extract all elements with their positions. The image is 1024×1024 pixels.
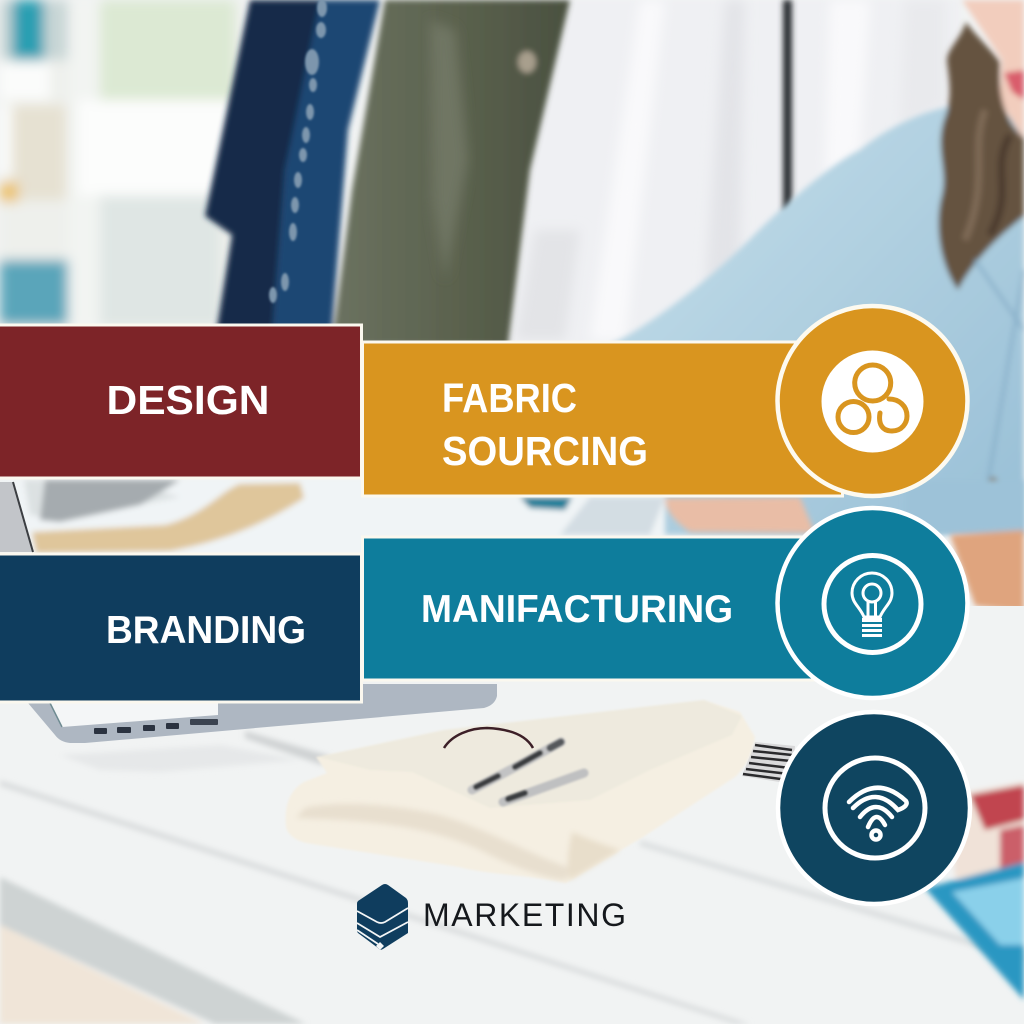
white garment — [508, 0, 960, 345]
glasses arc — [444, 728, 533, 748]
panel: Design — [0, 325, 362, 478]
panel: Branding — [0, 554, 362, 702]
panel: Manufacturing — [362, 537, 842, 680]
label: Fabric Sourcing: SOURCING — [442, 428, 648, 474]
pens — [472, 742, 584, 802]
desk back area — [0, 480, 1024, 612]
wordmark: MARKETING — [423, 897, 626, 933]
barcode card — [742, 742, 795, 784]
icon: stacked cube — [357, 884, 408, 950]
icon: light bulb badge — [778, 508, 968, 698]
icon: fabric knot badge — [778, 306, 968, 496]
panel: Fabric Sourcing — [362, 342, 842, 496]
garments — [205, 0, 792, 345]
label: Branding: BRANDING — [106, 609, 306, 652]
folded fabric and tools — [286, 700, 755, 883]
label: Fabric Sourcing: FABRIC — [442, 375, 577, 421]
logo: Marketing — [357, 884, 626, 950]
woman: shirt, face, hair — [610, 0, 1024, 535]
icon: wifi badge — [778, 712, 970, 904]
label: Manifacturing: MANIFACTURING — [421, 588, 733, 631]
table top — [0, 606, 1024, 1024]
garment beads — [269, 0, 327, 303]
laptop — [0, 482, 497, 743]
label: Design: DESIGN — [106, 377, 270, 423]
shelves and window — [0, 0, 240, 330]
garment fold — [430, 20, 468, 280]
